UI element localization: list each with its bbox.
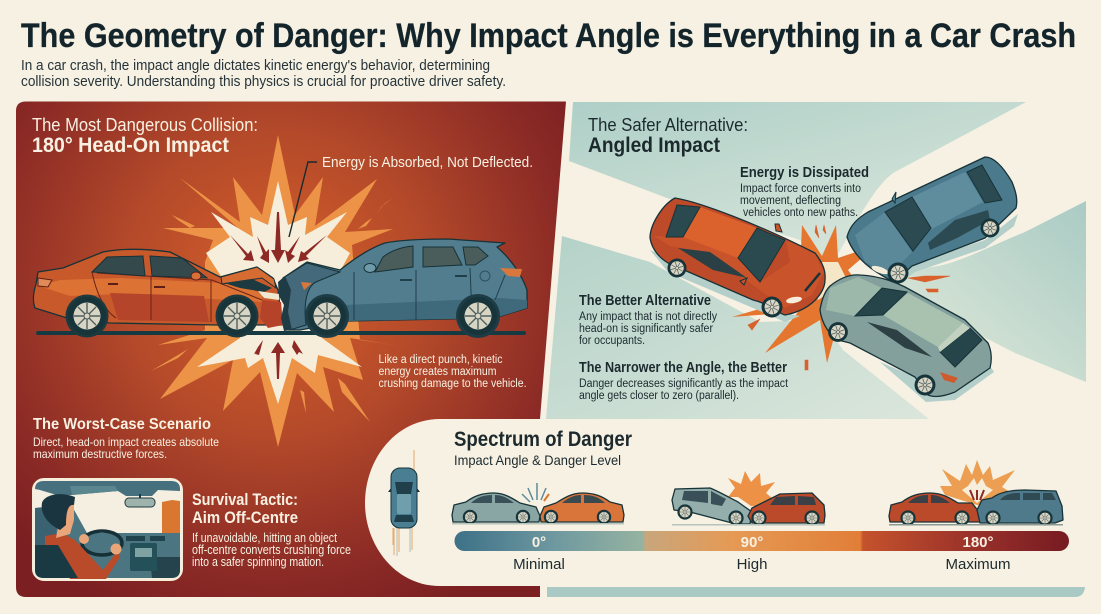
text block: energy dissipated: Impact force converts into [740, 183, 861, 195]
danger gradient bar [454, 531, 1069, 551]
danger level labels: Minimal [513, 556, 565, 573]
force arrows pointing inward [230, 212, 327, 379]
text block: worst-case scenario: Direct, head-on impact creates absolute [33, 435, 219, 449]
text block: energy dissipated [740, 165, 869, 219]
silver car top view [820, 275, 991, 399]
text block: narrower angle [579, 360, 789, 402]
text block: survival tactic: into a safer spinning mation. [192, 555, 324, 569]
danger level labels: Maximum [945, 556, 1011, 573]
teal background shapes [546, 102, 1086, 597]
heading: spectrum of danger: Impact Angle & Danger Level [454, 452, 621, 468]
panel: spectrum of danger [365, 419, 1101, 586]
callout: energy absorbed: Energy is Absorbed, Not Deflected. [322, 155, 533, 171]
angle labels: 90° [741, 534, 763, 551]
text block: better alternative: for occupants. [579, 335, 645, 347]
text block: narrower angle: Danger decreases significantly as the impact [579, 378, 789, 390]
intro text: collision severity. Understanding this physics is crucial for proactive driver safety. [21, 73, 506, 90]
red sedan [33, 249, 283, 338]
blue car top view [847, 157, 1017, 287]
icon: car top view with skid lines [388, 450, 420, 556]
crumpled metal at impact point [278, 276, 292, 331]
text block: survival tactic: off-centre converts crushing force [192, 543, 351, 557]
angle labels [532, 534, 994, 551]
text block: better alternative: The Better Alternative [579, 293, 711, 309]
text block: worst-case scenario: The Worst-Case Scenario [33, 416, 211, 433]
spectrum panel background [365, 419, 1101, 586]
text block: energy dissipated: Energy is Dissipated [740, 165, 869, 181]
debris marks [748, 225, 950, 370]
blue SUV [283, 239, 527, 338]
heading: spectrum of danger [454, 428, 632, 468]
text block: energy dissipated: vehicles onto new paths. [743, 207, 858, 219]
text block: worst-case scenario: maximum destructive forces. [33, 447, 167, 461]
spark highlight [812, 262, 846, 300]
panel: angled impact [546, 102, 1086, 597]
danger level labels [513, 556, 1011, 573]
ground line [36, 331, 526, 335]
scene: 0 degree glancing cars [452, 483, 624, 524]
text block: survival tactic: Survival Tactic: [192, 491, 298, 509]
collision spark [732, 225, 877, 363]
heading: safer alternative: The Safer Alternative: [588, 114, 748, 135]
heading: most dangerous collision: 180° Head-On Impact [32, 134, 229, 157]
callout: direct punch: energy creates maximum [378, 366, 496, 378]
danger level labels: High [737, 556, 767, 573]
starburst explosion [151, 135, 400, 447]
intro text [21, 57, 506, 90]
scene: 90 degree crash [672, 471, 825, 526]
callout: direct punch: crushing damage to the vehicle. [378, 378, 526, 390]
text block: better alternative [579, 293, 717, 347]
text block: worst-case scenario [33, 416, 219, 461]
text block: survival tactic [192, 491, 351, 569]
heading: safer alternative [588, 114, 748, 157]
leader line [289, 162, 317, 237]
intro text: In a car crash, the impact angle dictates kinetic energy's behavior, determining [21, 57, 490, 74]
scene: 180 degree crash [889, 460, 1063, 526]
orange car top view [650, 198, 825, 321]
text block: better alternative: Any impact that is not directly [579, 311, 717, 323]
text block: narrower angle: The Narrower the Angle, the Better [579, 360, 787, 376]
callout: direct punch [378, 354, 526, 390]
callout: direct punch: Like a direct punch, kinetic [378, 354, 503, 366]
text block: survival tactic: If unavoidable, hitting an object [192, 531, 337, 545]
heading: most dangerous collision: The Most Dangerous Collision: [32, 114, 258, 135]
heading: most dangerous collision [32, 114, 258, 157]
text block: survival tactic: Aim Off-Centre [192, 509, 298, 527]
text block: energy dissipated: movement, deflecting [740, 195, 841, 207]
angle labels: 0° [532, 534, 546, 551]
panel: head-on collision [16, 102, 566, 597]
angle labels: 180° [962, 534, 994, 551]
car shadows [650, 214, 1018, 402]
heading: safer alternative: Angled Impact [588, 134, 720, 157]
text block: narrower angle: angle gets closer to zero (parallel). [579, 390, 739, 402]
text block: better alternative: head-on is significantly safer [579, 323, 713, 335]
panel background red [16, 102, 566, 597]
illustration: driver at wheel [33, 479, 182, 580]
heading: spectrum of danger: Spectrum of Danger [454, 428, 632, 451]
